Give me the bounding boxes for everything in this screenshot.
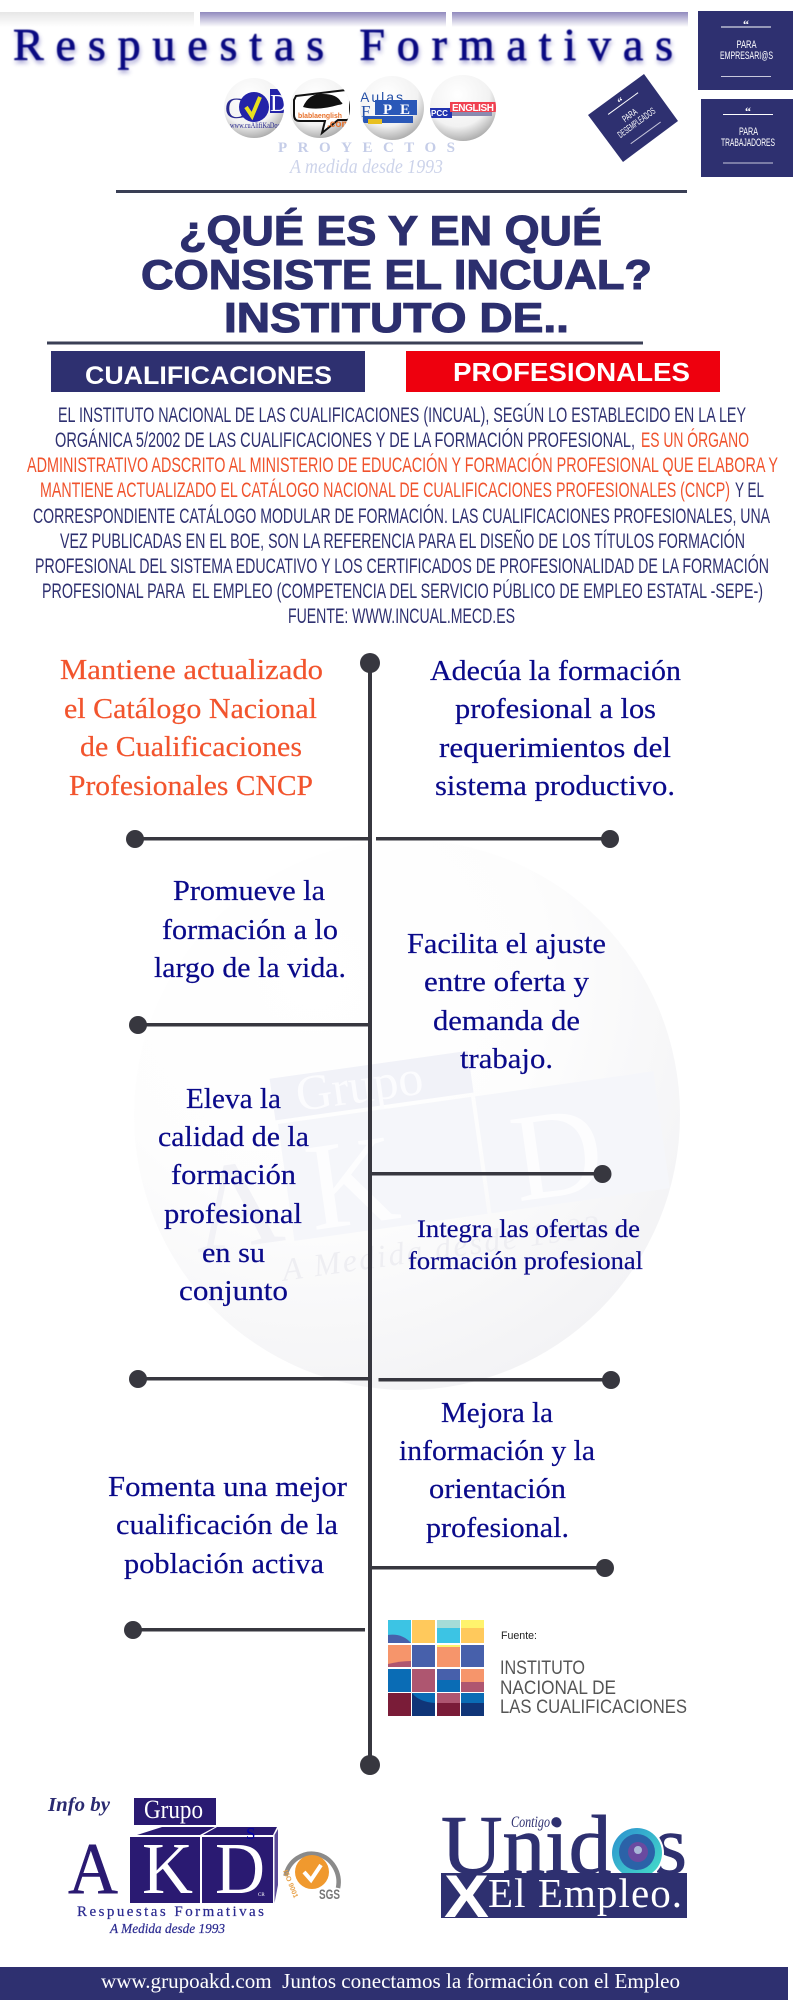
stray letter s: S [246, 1824, 255, 1843]
heading rule [47, 342, 643, 344]
contigo script: Contigo [511, 1814, 550, 1831]
text: promueve la formación: largo de la vida. [154, 952, 346, 984]
text: eleva la calidad: en su [202, 1237, 265, 1269]
source label: Fuente: [501, 1630, 537, 1642]
card: para empresarios: “ [743, 17, 749, 31]
card: para empresarios [698, 11, 793, 90]
label: cualificaciones: CUALIFICACIONES [85, 362, 332, 390]
empleo band: El Empleo. [488, 1870, 682, 1916]
seal: SGS ISO 9001 [281, 1854, 340, 1902]
branch right 2 [370, 1165, 612, 1183]
main heading: CONSISTE EL INCUAL? [141, 251, 652, 298]
intro paragraph: Y EL [735, 479, 764, 502]
cube D [202, 1827, 278, 1909]
text: mejora la información: información y la [399, 1435, 595, 1467]
text: promueve la formación: Promueve la [173, 875, 325, 907]
text: eleva la calidad: profesional [164, 1198, 302, 1230]
text: integra las ofertas [408, 1216, 643, 1275]
text: mantiene actualizado: el Catálogo Nacional [64, 693, 317, 725]
text: fomenta una mejor: población activa [124, 1548, 324, 1580]
institute name: NACIONAL DE [500, 1678, 616, 1699]
intro paragraph: FUENTE: WWW.INCUAL.MECD.ES [288, 605, 515, 628]
card: para desempleados (rotated) [588, 74, 678, 162]
logo: unidos x el empleo [441, 1799, 687, 1930]
ball: PCC english [428, 75, 496, 141]
text: adecúa la formación: Adecúa la formación [430, 655, 682, 687]
text: mejora la información [399, 1397, 595, 1544]
main heading: INSTITUTO DE.. [224, 294, 569, 341]
ball: cualifikados: D [270, 91, 287, 117]
watermark ball: K [298, 1109, 406, 1258]
cube K [130, 1827, 215, 1909]
branch right 3 [378, 1371, 620, 1389]
empleo band [441, 1863, 687, 1930]
footer bar: www.grupoakd.com Juntos conectamos la formación con el Empleo [101, 1969, 680, 1993]
ball: aulas FP: Aulas [360, 89, 403, 105]
text: eleva la calidad: calidad de la [158, 1121, 309, 1153]
text: adecúa la formación: profesional a los [455, 693, 656, 725]
branch left 2 [129, 1016, 370, 1034]
label: cualificaciones [51, 351, 365, 392]
text: eleva la calidad: formación [171, 1159, 297, 1191]
brand title: Respuestas Formativas [13, 19, 673, 70]
ball: blablaenglish [290, 78, 350, 138]
text: facilita el ajuste: trabajo. [460, 1043, 553, 1075]
seal: SGS ISO 9001: SGS [319, 1886, 340, 1902]
text: mantiene actualizado: Mantiene actualizado [60, 654, 323, 686]
text: facilita el ajuste: entre oferta y [424, 966, 590, 998]
ball: blablaenglish: .com [327, 119, 350, 130]
proyectos tagline: PROYECTOS [278, 140, 455, 156]
proyectos tagline [278, 140, 455, 178]
ball: aulas FP: P [383, 102, 392, 118]
text: facilita el ajuste: demanda de [433, 1005, 580, 1037]
text: mejora la información: orientación [429, 1473, 567, 1505]
logo: grupo AKD [68, 1795, 278, 1937]
text: mantiene actualizado: Profesionales CNCP [69, 770, 313, 802]
logo: instituto nacional de las cualificaciones [388, 1620, 687, 1718]
text: integra las ofertas: formación profesional [408, 1248, 643, 1275]
grupo box: Grupo [144, 1795, 203, 1824]
since: A Medida desde 1993 [109, 1922, 225, 1937]
text: eleva la calidad: Eleva la [186, 1083, 281, 1115]
branch right 1 [376, 830, 619, 848]
text: mejora la información: profesional. [426, 1512, 569, 1544]
card: para desempleados (rotated): DESEMPLEADOS [616, 106, 658, 141]
text: mantiene actualizado [60, 654, 323, 802]
ball: blablaenglish: blablaenglish [298, 113, 342, 120]
main heading [141, 207, 652, 341]
ball: cualifikados: C [225, 92, 245, 125]
watermark ball: Grupo [292, 1049, 426, 1122]
ball: PCC english: PCC [431, 109, 448, 118]
top rule [116, 190, 687, 193]
text: fomenta una mejor [108, 1471, 347, 1580]
text: promueve la formación [154, 875, 346, 984]
card: para desempleados (rotated): “ [615, 95, 627, 108]
label: profesionales [406, 351, 720, 392]
institute name: LAS CUALIFICACIONES [500, 1697, 687, 1718]
branch left 1 [126, 830, 370, 848]
ball: cualifikados [224, 78, 287, 138]
footer bar [0, 1967, 788, 2000]
watermark ball [134, 840, 680, 1390]
institute name: INSTITUTO [500, 1658, 585, 1679]
proyectos tagline: A medida desde 1993 [288, 156, 443, 178]
intro paragraph: ES UN ÓRGANO [641, 429, 749, 452]
ball: aulas FP: E [400, 102, 410, 118]
banner gradient bars [0, 12, 688, 27]
watermark ball: A [182, 1131, 290, 1280]
ball: cualifikados: www.cuAlifiKaDos [230, 121, 280, 130]
watermark ball: A Medida desde 1993 [278, 1207, 602, 1288]
text: facilita el ajuste [407, 928, 606, 1075]
lens icon [610, 1826, 664, 1880]
timeline [124, 653, 620, 1775]
text: integra las ofertas: Integra las ofertas de [417, 1216, 640, 1243]
header banner [0, 12, 688, 70]
text: adecúa la formación: requerimientos del [439, 732, 671, 764]
ball: aulas FP [360, 76, 424, 140]
branch left 4 [124, 1621, 365, 1639]
tagline: Respuestas Formativas [77, 1904, 264, 1920]
watermark ball: D [503, 1080, 611, 1229]
text: fomenta una mejor: cualificación de la [116, 1509, 338, 1541]
text: facilita el ajuste: Facilita el ajuste [407, 928, 606, 960]
text: eleva la calidad: conjunto [179, 1275, 288, 1307]
branch right 4 [372, 1559, 614, 1577]
card: para trabajadores: “ [745, 104, 751, 118]
seal: SGS ISO 9001: ISO 9001 [281, 1869, 299, 1899]
intro paragraph [27, 404, 778, 628]
empleo band: X [444, 1863, 489, 1930]
text: adecúa la formación [430, 655, 682, 802]
main heading: ¿QUÉ ES Y EN QUÉ [179, 207, 602, 254]
institute name [500, 1658, 687, 1718]
unidos word: Unidos [441, 1799, 687, 1892]
cube D: CR [258, 1893, 265, 1898]
cube K: K [142, 1828, 193, 1909]
label: profesionales: PROFESIONALES [453, 357, 690, 387]
ball: aulas FP: F [361, 102, 370, 121]
text: mantiene actualizado: de Cualificaciones [80, 731, 302, 763]
text: adecúa la formación: sistema productivo. [435, 770, 675, 802]
ball: PCC english: ENGLISH [452, 103, 494, 114]
card: para trabajadores: PARA [739, 126, 758, 138]
branch left 3 [129, 1370, 370, 1388]
logo mosaic [388, 1620, 484, 1716]
text: eleva la calidad [158, 1083, 309, 1307]
cube D: D [215, 1828, 265, 1909]
card: para desempleados (rotated): PARA [620, 106, 640, 125]
letter A: A [68, 1828, 118, 1909]
text: promueve la formación: formación a lo [162, 914, 338, 946]
project logo balls [224, 75, 496, 141]
text: mejora la información: Mejora la [441, 1397, 553, 1429]
card: para trabajadores [701, 99, 793, 177]
timeline spine [360, 653, 380, 1775]
text: fomenta una mejor: Fomenta una mejor [108, 1471, 347, 1503]
info by label: Info by [47, 1794, 110, 1816]
card: para empresarios: PARA [736, 39, 757, 51]
